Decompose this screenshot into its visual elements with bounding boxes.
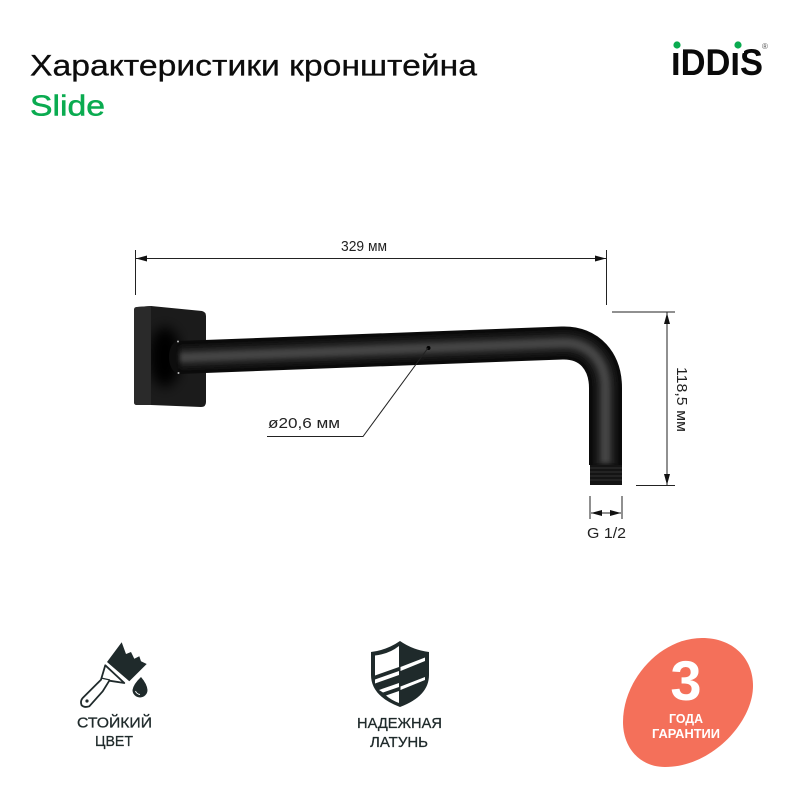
threaded end: [590, 465, 622, 485]
feature: reliable brass: ЛАТУНЬ: [370, 734, 428, 751]
label: СТОЙКИЙ: [77, 714, 152, 732]
badge: 3-year warranty: ГАРАНТИИ: [652, 726, 720, 741]
dimension: length 329 mm: 329 мм: [341, 238, 387, 255]
icon: paint drop: [132, 677, 148, 698]
feature: reliable brass: [357, 641, 442, 751]
dimension: thread G 1/2: G 1/2: [587, 525, 626, 542]
badge: 3-year warranty: [623, 638, 753, 767]
dimension: thread G 1/2: [587, 496, 626, 542]
label: НАДЕЖНАЯ: [357, 715, 442, 732]
dimension: height 118.5 mm: 118,5 мм: [673, 367, 689, 432]
logo: IDDIS: IDDIS: [671, 42, 763, 83]
badge: 3-year warranty: ГОДА: [669, 711, 704, 726]
feature: durable colour: [77, 642, 152, 750]
arm tube: [169, 341, 606, 465]
icon: paint brush: [81, 642, 147, 707]
title: Характеристики кронштейна: [30, 50, 477, 82]
shower arm bracket: [134, 306, 622, 485]
callout: tube diameter: [267, 346, 430, 436]
wall plate: [134, 306, 206, 407]
feature: durable colour: ЦВЕТ: [95, 733, 133, 750]
dimension: length 329 mm: [136, 238, 606, 305]
badge: 3-year warranty: 3: [670, 649, 702, 712]
icon: shield: [371, 641, 429, 707]
callout: tube diameter: ø20,6 мм: [268, 415, 340, 432]
dimension: height 118.5 mm: [612, 312, 689, 486]
logo: IDDIS: ®: [762, 42, 768, 51]
subtitle: series name: Slide: [30, 90, 105, 122]
